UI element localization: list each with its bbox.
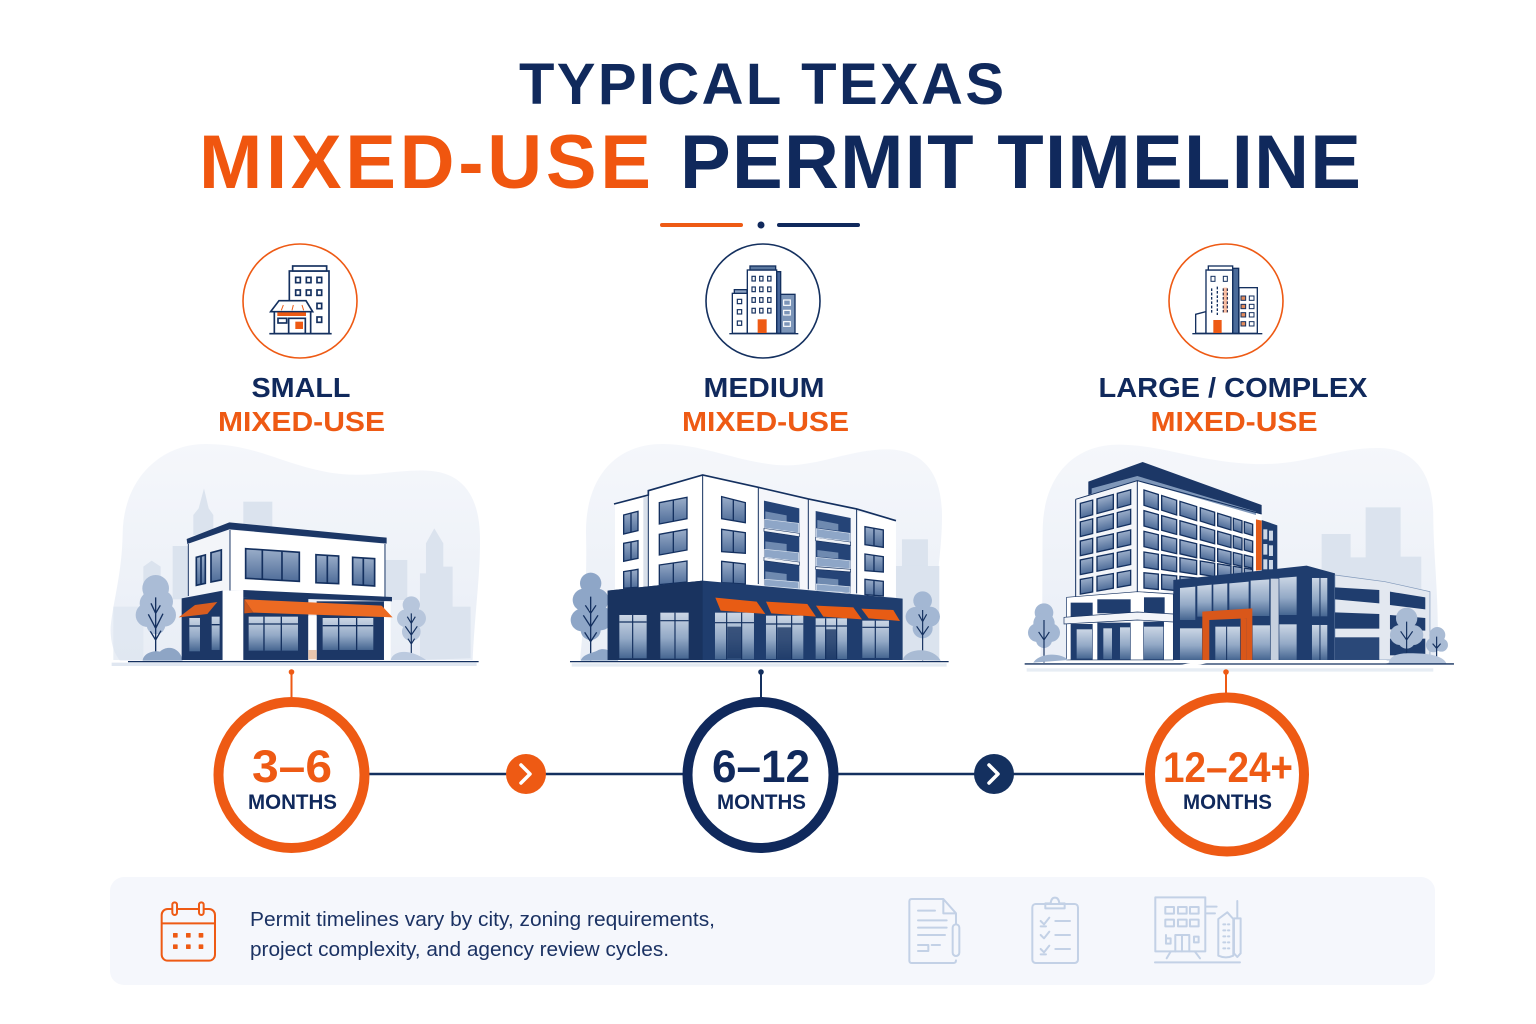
podium: left retail — [1064, 592, 1173, 660]
duration: 12-24+ months: 12–24+ — [1163, 744, 1293, 792]
tree: left — [571, 573, 613, 661]
tree: right — [397, 596, 426, 660]
title: TYPICAL TEXAS — [519, 52, 1004, 117]
icon: checklist clipboard — [1032, 898, 1078, 963]
heading: medium mixed-use — [682, 372, 849, 437]
duration: 12-24+ months: MONTHS — [1183, 791, 1272, 814]
tree: left — [136, 575, 176, 660]
arrow: small to medium — [506, 754, 546, 794]
connector: large — [1223, 669, 1229, 695]
title: PERMIT TIMELINE — [680, 120, 1361, 205]
podium: central glazed block — [1173, 566, 1335, 660]
duration: 3-6 months — [218, 702, 364, 848]
duration: 6-12 months — [688, 702, 834, 848]
balcony glazing — [765, 511, 838, 585]
window grid: tower left face — [1080, 490, 1131, 594]
panel: small mixed-use — [111, 244, 480, 664]
podium: parking structure — [1335, 575, 1430, 660]
connector: medium — [758, 669, 764, 698]
duration: 3-6 months: MONTHS — [248, 791, 337, 814]
heading: small mixed-use — [218, 372, 385, 437]
text: footer note: Permit timelines vary by city, zoning requirements, — [250, 909, 715, 931]
icon: document with pen — [909, 899, 959, 963]
window grid: tower right face — [1144, 490, 1253, 597]
trees — [1028, 603, 1448, 664]
duration: 6-12 months: 6–12 — [712, 741, 810, 792]
icon: building plan — [1155, 897, 1241, 962]
icon: medium building — [706, 244, 820, 358]
timeline — [218, 669, 1304, 852]
illustration: small two-storey building — [111, 444, 480, 664]
connector: small — [289, 669, 294, 698]
illustration: large mid-rise complex — [1025, 445, 1454, 670]
panel: large complex mixed-use — [1025, 244, 1454, 670]
heading: medium mixed-use: MEDIUM — [704, 372, 824, 403]
title — [199, 52, 1361, 205]
text: footer note: project complexity, and agency review cycles. — [250, 939, 669, 961]
icon: small building with storefront — [243, 244, 357, 358]
icon: calendar — [162, 902, 215, 961]
duration: 12-24+ months — [1150, 698, 1304, 852]
icon: large building — [1169, 244, 1283, 358]
panel: medium mixed-use — [570, 244, 949, 665]
duration: 3-6 months: 3–6 — [252, 741, 332, 792]
panel: footer note — [110, 877, 1435, 985]
heading: large complex mixed-use — [1098, 372, 1368, 437]
heading: large complex mixed-use: LARGE / COMPLEX — [1098, 372, 1368, 403]
title: MIXED-USE — [199, 120, 651, 205]
duration: 6-12 months: MONTHS — [717, 791, 806, 814]
tree: right — [906, 591, 940, 661]
illustration: medium four-storey building — [570, 444, 949, 665]
heading: medium mixed-use: MIXED-USE — [682, 406, 849, 437]
heading: large complex mixed-use: MIXED-USE — [1150, 406, 1318, 437]
heading: small mixed-use: MIXED-USE — [218, 406, 385, 437]
heading: small mixed-use: SMALL — [252, 372, 350, 403]
text: footer note — [250, 909, 715, 961]
arrow: medium to large — [974, 754, 1014, 794]
